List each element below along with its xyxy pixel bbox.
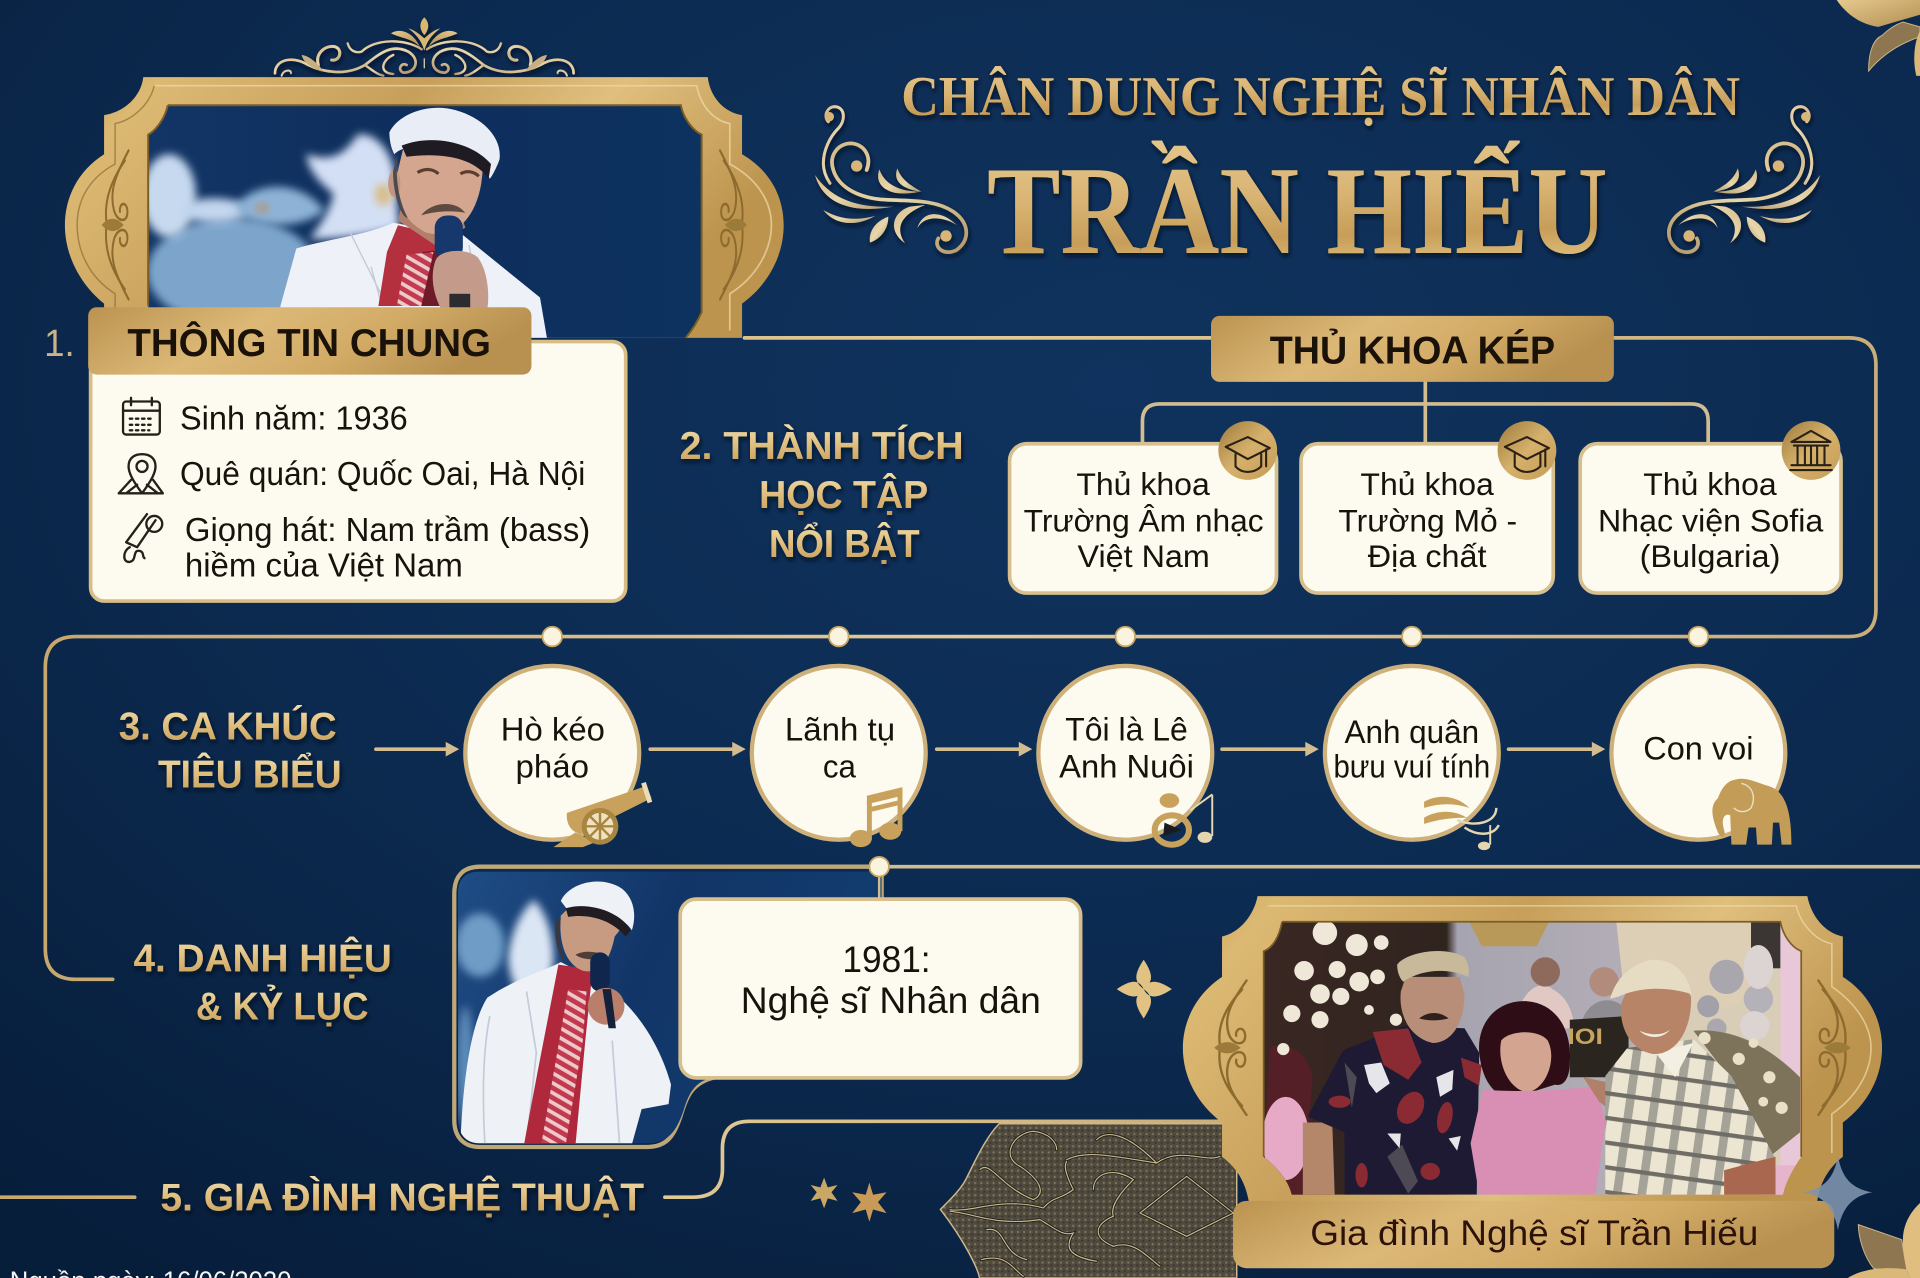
song: Hò kéo pháo xyxy=(465,666,652,847)
timeline dots xyxy=(542,627,1708,646)
song: Anh quân bưu vui tính: Anh quân xyxy=(1344,714,1479,750)
heading: section 2: 2. THÀNH TÍCH xyxy=(680,424,964,468)
white flowers xyxy=(1277,921,1402,1055)
jacket xyxy=(460,962,671,1145)
icon: cannon xyxy=(553,782,652,847)
cap xyxy=(561,882,634,930)
hand and mic xyxy=(590,952,610,992)
eyes and moustache xyxy=(418,169,479,176)
gold frame body xyxy=(65,77,784,338)
woman xyxy=(1471,1001,1609,1195)
scroll carving left xyxy=(102,151,129,299)
hand and mic xyxy=(435,215,463,260)
scroll carving right xyxy=(720,151,747,299)
icon: institute building xyxy=(1782,421,1840,480)
card: Sofia conservatory: Thủ khoa xyxy=(1643,467,1777,502)
heading: general information: THÔNG TIN CHUNG xyxy=(127,320,491,365)
number 1: 1. xyxy=(44,323,75,365)
head xyxy=(398,210,466,245)
song: Anh quân bưu vui tính xyxy=(1325,666,1499,850)
ornament: four petal star xyxy=(1117,960,1172,1018)
connector dot to title card xyxy=(869,857,889,899)
title card: 1981: 1981: xyxy=(842,939,931,980)
panel: general information: hiềm của Việt Nam xyxy=(185,548,463,585)
top filigree ornament xyxy=(275,17,574,76)
heading: section 2: HỌC TẬP xyxy=(759,473,928,517)
title ornament left xyxy=(815,107,966,252)
heading ribbon xyxy=(88,307,531,375)
silver balloons xyxy=(1697,945,1773,1041)
arrows between songs xyxy=(376,742,1605,757)
backdrop details xyxy=(1469,922,1549,946)
family caption ribbon: Gia đình Nghệ sĩ Trần Hiếu xyxy=(1310,1213,1758,1253)
text: hometown: Quê quán: Quốc Oai, Hà Nội xyxy=(180,456,585,493)
icon: music notes xyxy=(850,787,902,847)
panel: general information xyxy=(88,307,626,601)
left man xyxy=(1303,951,1482,1195)
blurred flowers xyxy=(508,900,553,998)
card: mining school: Địa chất xyxy=(1368,539,1487,574)
blurred flowers xyxy=(149,216,313,308)
heading: section 3: 3. CA KHÚC xyxy=(119,704,337,748)
icon: graduation cap xyxy=(1498,421,1556,480)
red shirt xyxy=(378,225,436,306)
family photo frame xyxy=(1183,896,1882,1202)
title ornament right xyxy=(1669,107,1820,252)
badge: double valedictorian xyxy=(1211,316,1614,382)
scroll carving left xyxy=(1214,981,1247,1115)
scroll carving right xyxy=(1818,981,1851,1115)
heading: section 3: TIÊU BIỂU xyxy=(158,752,342,797)
card: mining school: Thủ khoa xyxy=(1360,467,1495,502)
icon: graduation cap xyxy=(1218,421,1277,480)
text: voice type: Giọng hát: Nam trầm (bass) xyxy=(185,512,590,549)
song: Anh quân bưu vui tính: bưu vuí tính xyxy=(1333,748,1490,784)
jacket xyxy=(280,223,547,340)
info card background xyxy=(91,342,626,601)
song: Tôi là Lê Anh Nuôi: Anh Nuôi xyxy=(1059,748,1194,784)
watermark star xyxy=(1804,1156,1872,1230)
song: Con voi xyxy=(1611,666,1791,845)
song: Hò kéo pháo: pháo xyxy=(516,748,589,784)
portrait frame xyxy=(65,77,784,340)
heading: section 2: NỔI BẬT xyxy=(769,521,920,566)
gold frame body xyxy=(1183,896,1882,1202)
heading: section 5: 5. GIA ĐÌNH NGHỆ THUẬT xyxy=(160,1176,644,1220)
red shirt and tie xyxy=(524,965,593,1145)
cap xyxy=(389,108,500,179)
portrait photo xyxy=(142,103,708,340)
backdrop portraits xyxy=(1518,985,1575,1028)
card: Sofia conservatory: (Bulgaria) xyxy=(1640,539,1780,574)
song: Hò kéo pháo: Hò kéo xyxy=(501,712,605,748)
title line 2: TRẦN HIẾU xyxy=(987,139,1608,281)
connector: heading 5 to family xyxy=(0,1121,1237,1197)
card: Sofia conservatory: Nhạc viện Sofia xyxy=(1598,503,1824,538)
icon: calendar xyxy=(123,398,160,435)
song: Con voi: Con voi xyxy=(1643,731,1753,767)
connector: upper rail to bottom panel xyxy=(478,865,1920,868)
decorative lace panel xyxy=(940,1124,1237,1278)
title xyxy=(901,65,1740,281)
family caption ribbon xyxy=(1233,1201,1834,1268)
icon: map pin xyxy=(119,454,163,493)
face xyxy=(560,908,624,971)
song: Lãnh tụ ca: ca xyxy=(823,748,857,784)
portrait photo panel xyxy=(454,867,884,1147)
icon: microphone xyxy=(124,514,162,562)
floral arrangement right xyxy=(1693,1030,1800,1157)
text: birth year: Sinh năm: 1936 xyxy=(180,401,408,438)
title card: 1981 xyxy=(680,899,1081,1078)
song: Tôi là Lê Anh Nuôi xyxy=(1038,666,1212,845)
photo inner edge xyxy=(1264,922,1801,1157)
bracket connectors xyxy=(1142,382,1708,443)
card: mining school xyxy=(1301,421,1556,593)
photo inner edge xyxy=(148,105,702,338)
title line 1: CHÂN DUNG NGHỆ SĨ NHÂN DÂN xyxy=(901,65,1740,128)
icon: elephant xyxy=(1712,779,1791,845)
card: Vietnam music school: Trường Âm nhạc xyxy=(1024,503,1264,538)
corner flower bottom right xyxy=(1848,1203,1920,1278)
icon: ring and note xyxy=(1155,793,1212,845)
heading: section 4: 4. DANH HIỆU xyxy=(133,936,392,980)
song: Lãnh tụ ca xyxy=(752,666,926,847)
family photo xyxy=(1261,918,1806,1197)
corner flower top right xyxy=(1837,0,1920,76)
connector: heading 2 drop xyxy=(842,340,845,408)
heading: section 4: & KỶ LỤC xyxy=(196,985,369,1029)
icon: ribbon and note xyxy=(1424,797,1499,850)
card: Sofia conservatory xyxy=(1580,421,1841,593)
card: mining school: Trường Mỏ - xyxy=(1338,503,1517,538)
connector line: upper snake path xyxy=(45,338,1876,979)
card: Vietnam music school: Việt Nam xyxy=(1078,539,1210,574)
heading: section 3 xyxy=(119,704,342,797)
card: Vietnam music school: Thủ khoa xyxy=(1076,467,1210,502)
backdrop number sign: IOI xyxy=(1567,1024,1603,1049)
song: Lãnh tụ ca: Lãnh tụ xyxy=(785,712,895,748)
right man xyxy=(1605,960,1776,1195)
heading: section 2 xyxy=(680,424,964,566)
ornament: small gold stars xyxy=(811,1178,887,1222)
connector: heading 4 to photo xyxy=(414,978,453,981)
title card: 1981: Nghệ sĩ Nhân dân xyxy=(741,980,1041,1021)
card: Vietnam music school xyxy=(1010,421,1277,593)
heading: section 4 xyxy=(133,936,392,1029)
song: Tôi là Lê Anh Nuôi: Tôi là Lê xyxy=(1065,712,1188,748)
badge: double valedictorian: THỦ KHOA KÉP xyxy=(1270,329,1555,373)
